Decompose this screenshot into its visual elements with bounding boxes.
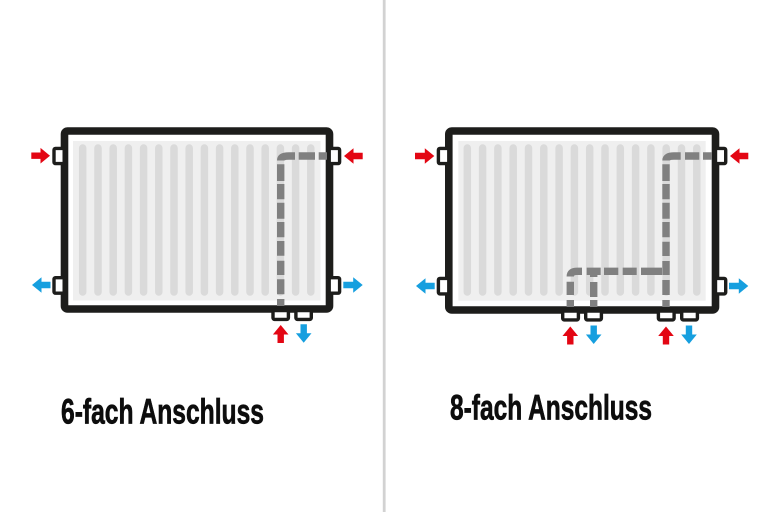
heading: 6-fach Anschluss: 6-fach Anschluss [61,392,264,432]
arrow: flow out lower left [32,277,50,293]
arrow: flow out bottom [296,324,312,343]
panel: 6-fach Anschluss [31,131,363,432]
side and bottom valves [438,148,726,320]
arrow: flow out bottom 2 [681,326,697,344]
radiator body left [64,131,330,309]
panel: 8-fach Anschluss [415,131,748,428]
arrow: flow in top left [415,148,434,164]
arrow: flow out lower left [416,278,435,294]
heading: 8-fach Anschluss: 8-fach Anschluss [450,388,652,428]
arrow: flow in top right [730,148,748,164]
arrow: flow in top left [31,148,50,164]
pipe: dashed internal routing [570,156,712,307]
arrow: flow in bottom 2 [658,326,674,344]
arrow: flow in bottom 1 [562,326,578,344]
arrow: flow out lower right [729,278,748,294]
arrow: flow out lower right [343,277,363,293]
arrow: flow in top right [344,148,363,164]
arrow: flow in bottom [273,325,288,343]
pipe: dashed internal routing [281,156,327,306]
arrow: flow out bottom 1 [586,326,602,344]
side and bottom valves [54,148,340,319]
radiator body right [449,131,716,310]
